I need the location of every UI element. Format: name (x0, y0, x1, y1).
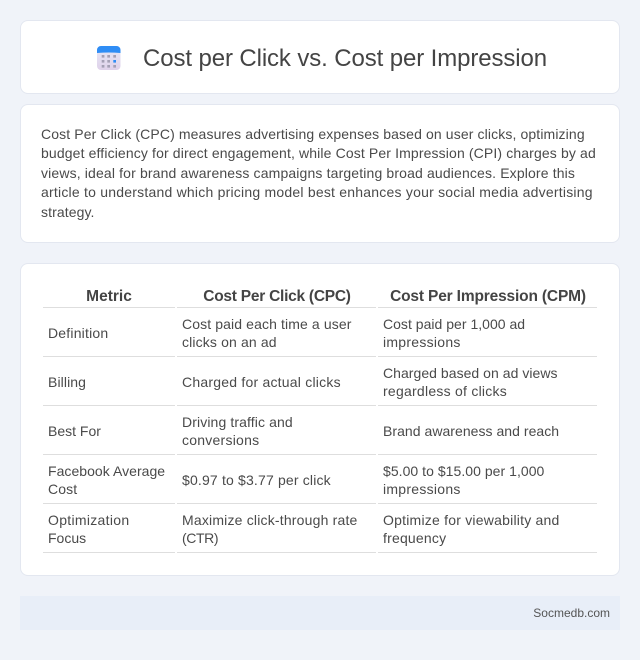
table: comparison: Charged for actual clicks (182, 374, 341, 390)
table: comparison: Driving traffic and (182, 414, 293, 430)
table: comparison: Cost paid each time a user (182, 316, 352, 332)
table: comparison: Maximize click-through rate (182, 512, 358, 528)
table: comparison: Optimize for viewability and (383, 512, 560, 528)
table header: Cost Per Impression (CPM) (390, 288, 586, 305)
table: comparison: Charged based on ad views (383, 365, 558, 381)
table: comparison: conversions (182, 432, 259, 448)
table: comparison: $0.97 to $3.77 per click (182, 472, 331, 488)
table: comparison: Definition (48, 325, 108, 341)
footer credit: Socmedb.com (533, 606, 610, 620)
table: comparison: impressions (383, 481, 461, 497)
table header: Metric (86, 288, 132, 305)
text block: introduction: budget efficiency for direct engagement, while Cost Per Impression (CPI) charges by ad (41, 145, 596, 161)
table: comparison: (CTR) (182, 530, 218, 546)
table: comparison: frequency (383, 530, 446, 546)
table: comparison (43, 288, 597, 553)
footer bar (20, 596, 620, 630)
table: comparison: Brand awareness and reach (383, 423, 559, 439)
table: comparison: Best For (48, 423, 101, 439)
text block: introduction: Cost Per Click (CPC) measures advertising expenses based on user clicks, optimizing (41, 126, 585, 142)
table: comparison: Billing (48, 374, 86, 390)
text block: introduction (41, 126, 596, 220)
text block: introduction: strategy. (41, 204, 95, 220)
icon: calendar (97, 46, 120, 70)
panel: title card (20, 20, 620, 94)
text block: introduction: views, ideal for brand awareness campaigns targeting broad audiences. Explore this (41, 165, 575, 181)
panel: introduction (20, 104, 620, 243)
table: comparison: Facebook Average (48, 463, 165, 479)
table: comparison: impressions (383, 334, 461, 350)
table: comparison: $5.00 to $15.00 per 1,000 (383, 463, 544, 479)
table: comparison: Cost (48, 481, 77, 497)
table: comparison: clicks on an ad (182, 334, 277, 350)
table: comparison: regardless of clicks (383, 383, 507, 399)
panel: comparison table (20, 263, 620, 576)
table header (86, 288, 586, 305)
table: comparison: Optimization (48, 512, 129, 528)
text block: introduction: article to understand which pricing model best enhances your social media advertising (41, 184, 593, 200)
table: comparison: Cost paid per 1,000 ad (383, 316, 525, 332)
title: Cost per Click vs. Cost per Impression (143, 45, 547, 72)
table: comparison: Focus (48, 530, 86, 546)
table header: Cost Per Click (CPC) (203, 288, 351, 305)
